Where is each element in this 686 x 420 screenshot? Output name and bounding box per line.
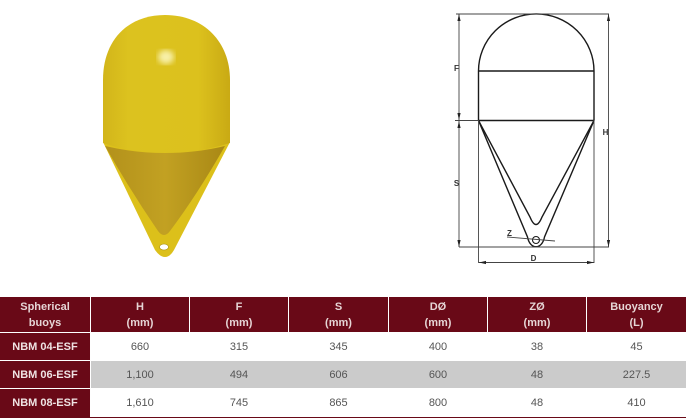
highlight [158, 50, 174, 64]
value: 48 [531, 397, 543, 409]
header cell [289, 297, 388, 332]
value [289, 361, 388, 388]
dimension labels: H [603, 128, 609, 137]
value: 606 [329, 368, 348, 380]
row label [0, 333, 90, 360]
header cell: ZØ [529, 300, 545, 312]
value [488, 361, 586, 388]
header cell: (mm) [425, 316, 451, 328]
header cell: (mm) [127, 316, 153, 328]
dimension lines [455, 14, 609, 263]
dimension labels: D [531, 254, 537, 263]
dimension labels: S [454, 179, 460, 188]
header cell [91, 297, 189, 332]
buoy body [103, 15, 230, 153]
value: 865 [329, 397, 348, 409]
value: 745 [230, 397, 248, 409]
row label: NBM 04-ESF [12, 340, 78, 352]
value: 660 [131, 340, 149, 352]
value: 315 [230, 340, 248, 352]
value [587, 361, 686, 388]
row label: NBM 08-ESF [12, 397, 78, 409]
eyelet [160, 244, 168, 250]
dimension labels: F [454, 64, 459, 73]
value: 48 [531, 368, 543, 380]
value: 600 [429, 368, 447, 380]
row label: NBM 06-ESF [12, 368, 78, 380]
header cell: buoys [29, 316, 61, 328]
header cell [587, 297, 686, 332]
header cell: (mm) [226, 316, 252, 328]
header cell: (L) [629, 316, 644, 328]
value: 410 [627, 397, 646, 409]
header cell: DØ [430, 300, 446, 312]
header cell: Buoyancy [610, 300, 663, 312]
header cell: (mm) [524, 316, 550, 328]
dimension labels [454, 64, 609, 263]
row label [0, 361, 90, 388]
row label [0, 389, 90, 417]
header cell: S [335, 300, 342, 312]
value: 227.5 [623, 368, 650, 380]
dimension labels: Z [507, 229, 512, 238]
value: 1,100 [126, 368, 154, 380]
value: 494 [230, 368, 248, 380]
value [91, 361, 189, 388]
header cell [389, 297, 487, 332]
value: 400 [429, 340, 447, 352]
header cell [0, 297, 90, 332]
header cell: H [136, 300, 144, 312]
header cell: F [236, 300, 242, 312]
buoy cone [105, 146, 225, 235]
bottom border [0, 417, 686, 418]
header cell [190, 297, 288, 332]
header cell: (mm) [325, 316, 352, 328]
header cell [488, 297, 586, 332]
row background [91, 361, 686, 388]
buoy flange [103, 142, 230, 257]
value [389, 361, 487, 388]
value: 345 [329, 340, 348, 352]
value: 38 [531, 340, 543, 352]
value: 1,610 [126, 397, 154, 409]
header cell: Spherical [20, 300, 70, 312]
buoy outline [478, 14, 594, 120]
value: 800 [429, 397, 447, 409]
value: 45 [630, 340, 643, 352]
value [190, 361, 288, 388]
